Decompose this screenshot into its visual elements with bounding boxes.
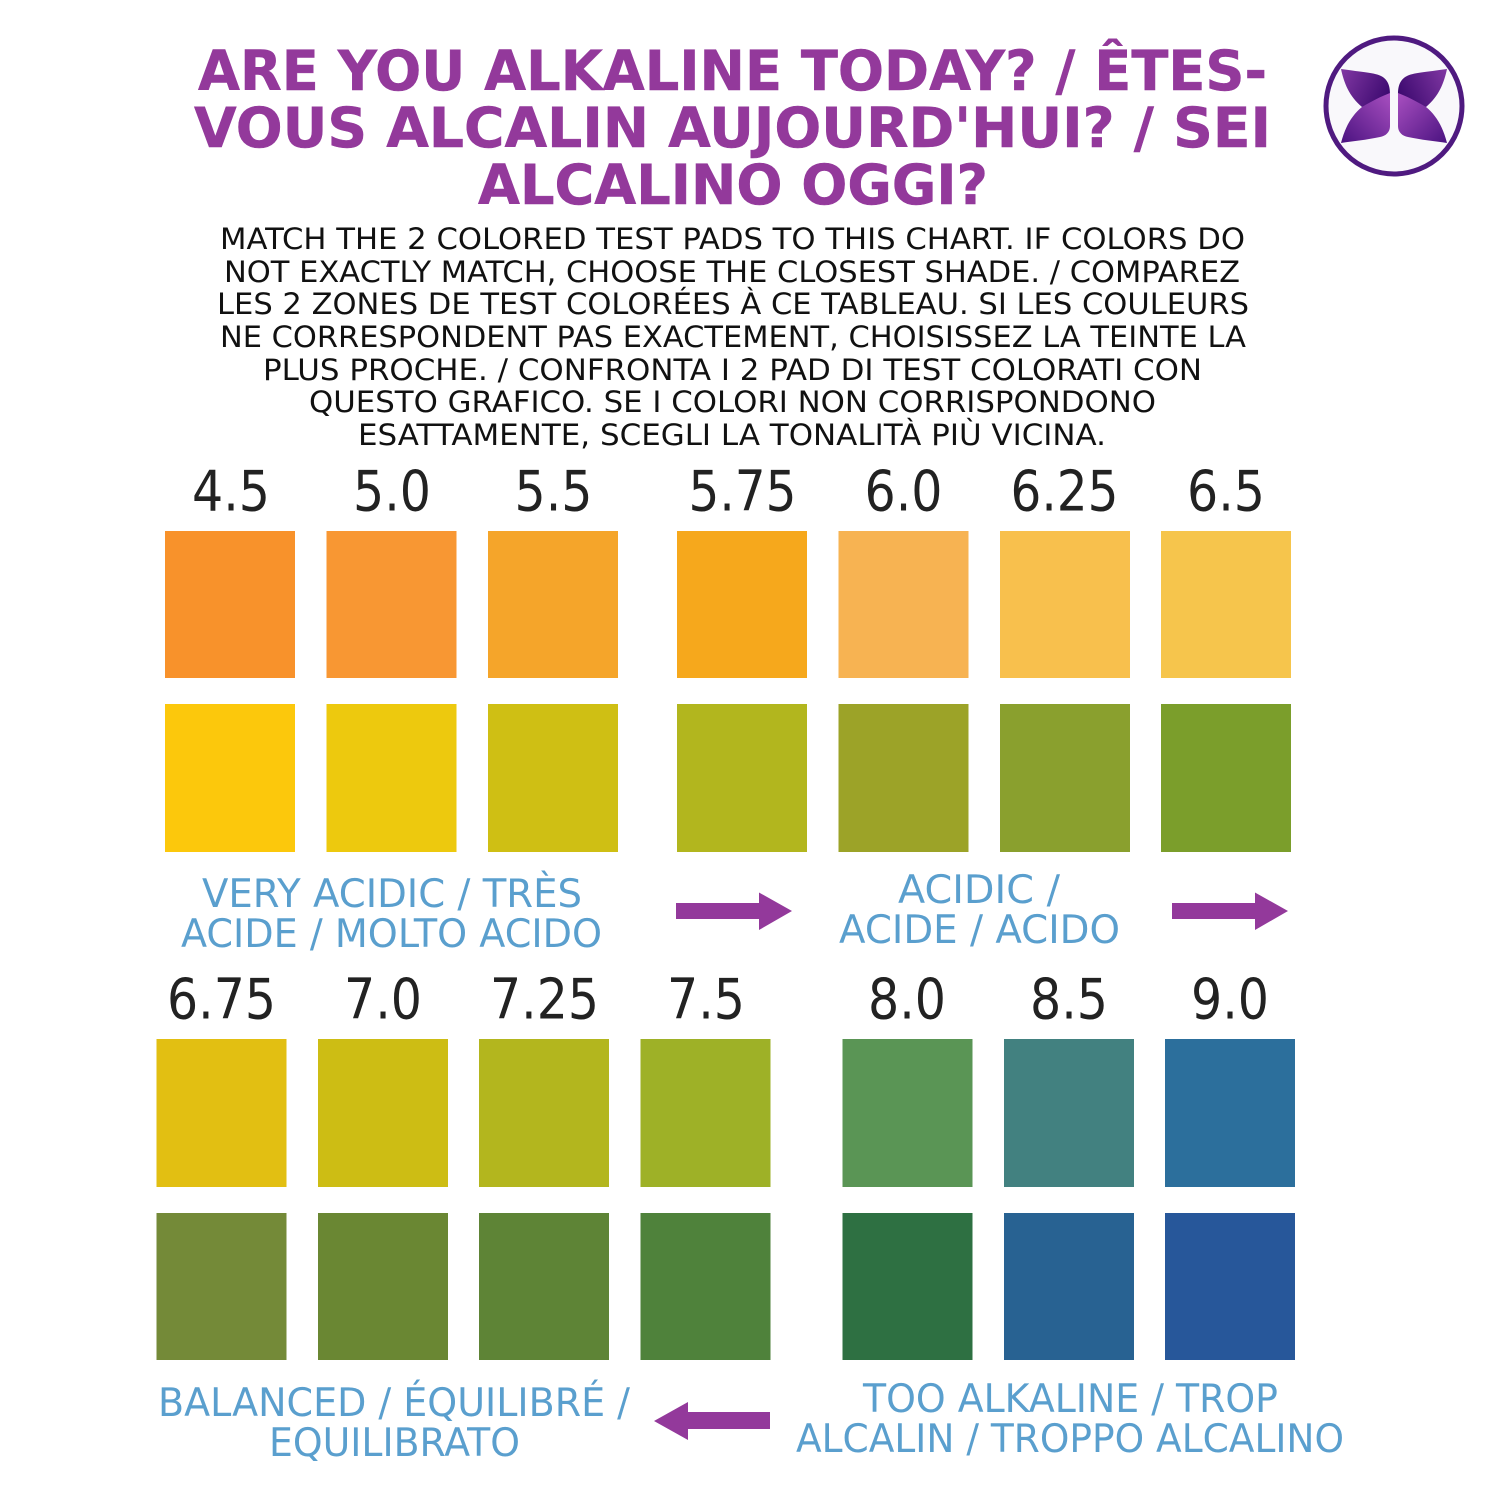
instructions text block: ESATTAMENTE, SCEGLI LA TONALITÀ PIÙ VICINA. bbox=[358, 416, 1106, 452]
instructions text block: MATCH THE 2 COLORED TEST PADS TO THIS CHART. IF COLORS DO bbox=[220, 222, 1245, 256]
label: balanced: EQUILIBRATO bbox=[269, 1421, 520, 1466]
pH labels upper: 5.0 bbox=[353, 460, 431, 524]
pH labels lower: 8.0 bbox=[868, 968, 946, 1032]
arrow: left to balanced bbox=[654, 1402, 770, 1440]
label: very acidic bbox=[181, 870, 602, 957]
instructions text block bbox=[217, 222, 1249, 452]
arrow: right to acidic bbox=[676, 892, 792, 930]
instructions text block: NE CORRESPONDENT PAS EXACTEMENT, CHOISISSEZ LA TEINTE LA bbox=[220, 320, 1246, 354]
title: VOUS ALCALIN AUJOURD'HUI? / SEI bbox=[194, 96, 1271, 161]
arrow: right to balanced bbox=[1172, 892, 1288, 930]
instructions text block: LES 2 ZONES DE TEST COLORÉES À CE TABLEAU. SI LES COULEURS bbox=[217, 286, 1249, 321]
pH labels lower: 6.75 bbox=[167, 968, 276, 1032]
label: too alkaline bbox=[796, 1377, 1344, 1462]
title: ARE YOU ALKALINE TODAY? / ÊTES- bbox=[198, 38, 1267, 104]
lower swatches row 2 bbox=[156, 1213, 1295, 1360]
label: balanced: BALANCED / ÉQUILIBRÉ / bbox=[158, 1379, 631, 1426]
upper swatches row 1 bbox=[165, 531, 1291, 678]
pH labels upper bbox=[192, 460, 1265, 524]
pH labels upper: 5.5 bbox=[514, 460, 592, 524]
label: acidic bbox=[839, 868, 1120, 953]
title bbox=[194, 38, 1271, 218]
pH labels upper: 6.0 bbox=[864, 460, 942, 524]
label: too alkaline: ALCALIN / TROPPO ALCALINO bbox=[796, 1417, 1344, 1462]
pH labels upper: 5.75 bbox=[688, 460, 796, 524]
label: very acidic: ACIDE / MOLTO ACIDO bbox=[181, 912, 602, 957]
pH labels lower: 7.0 bbox=[344, 968, 422, 1032]
pH labels lower: 8.5 bbox=[1030, 968, 1108, 1032]
pH labels lower: 7.5 bbox=[667, 968, 745, 1032]
label: acidic: ACIDIC / bbox=[898, 868, 1061, 913]
instructions text block: NOT EXACTLY MATCH, CHOOSE THE CLOSEST SHADE. / COMPAREZ bbox=[224, 255, 1240, 289]
label: acidic: ACIDE / ACIDO bbox=[839, 908, 1120, 953]
instructions text block: QUESTO GRAFICO. SE I COLORI NON CORRISPONDONO bbox=[309, 385, 1156, 419]
label: very acidic: VERY ACIDIC / TRÈS bbox=[202, 870, 582, 917]
label: too alkaline: TOO ALKALINE / TROP bbox=[862, 1377, 1278, 1422]
instructions text block: PLUS PROCHE. / CONFRONTA I 2 PAD DI TEST COLORATI CON bbox=[263, 353, 1202, 387]
lower swatches row 1 bbox=[156, 1039, 1295, 1187]
panel: lower pH chart bbox=[156, 968, 1295, 1360]
upper swatches row 2 bbox=[165, 704, 1291, 852]
pH labels lower bbox=[167, 968, 1269, 1032]
pH labels lower: 7.25 bbox=[490, 968, 599, 1032]
title: ALCALINO OGGI? bbox=[478, 153, 988, 218]
panel: upper pH chart bbox=[165, 460, 1291, 852]
icon: butterfly logo bbox=[1326, 38, 1462, 174]
pH labels lower: 9.0 bbox=[1191, 968, 1269, 1032]
pH labels upper: 4.5 bbox=[192, 460, 270, 524]
pH labels upper: 6.5 bbox=[1187, 460, 1265, 524]
pH labels upper: 6.25 bbox=[1010, 460, 1118, 524]
label: balanced bbox=[158, 1379, 631, 1466]
